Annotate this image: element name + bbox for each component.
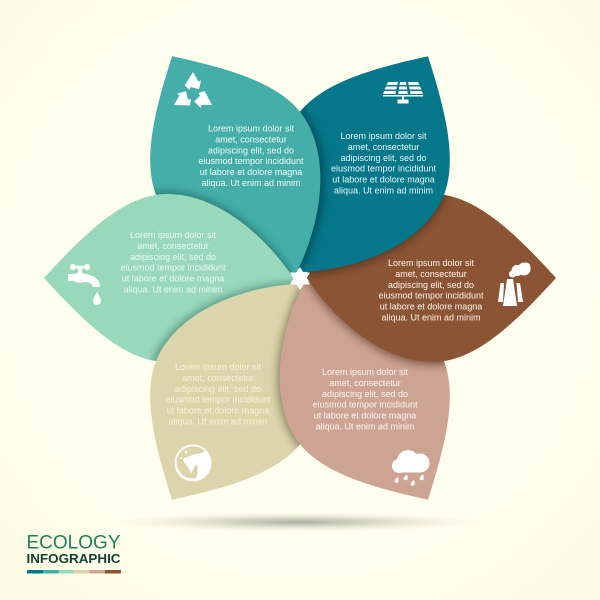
title	[26, 532, 120, 566]
text: solar: amet, consectetur	[348, 142, 419, 152]
text: water: Lorem ipsum dolor sit	[130, 230, 217, 240]
text: water	[120, 230, 226, 294]
text: factory: ut labore et dolore magna	[380, 302, 482, 312]
center star	[290, 267, 310, 290]
panel: solar	[298, 56, 450, 278]
text: water: adipiscing elit, sed do	[130, 252, 216, 262]
text: rain: eiusmod tempor incididunt	[312, 400, 418, 410]
icon: solar panel	[383, 82, 423, 104]
text: factory: eiusmod tempor incididunt	[378, 290, 484, 300]
text: factory: adipiscing elit, sed do	[388, 280, 474, 290]
text: solar: aliqua. Ut enim ad minim	[334, 186, 433, 196]
text: solar: ut labore et dolore magna	[332, 174, 435, 184]
text: factory	[378, 258, 484, 322]
text: factory: Lorem ipsum dolor sit	[388, 258, 475, 268]
text: rain: ut labore et dolore magna	[314, 410, 416, 420]
colour legend bar	[27, 570, 121, 574]
ground shadow	[108, 512, 488, 532]
panel: rain	[272, 281, 450, 500]
text: factory: amet, consectetur	[395, 269, 467, 279]
text: rain	[312, 367, 418, 432]
text: rain: adipiscing elit, sed do	[322, 389, 408, 399]
panel: factory	[305, 194, 556, 365]
text: recycling	[198, 124, 304, 188]
text: water: eiusmod tempor incididunt	[120, 262, 226, 272]
icon: recycling	[171, 71, 212, 112]
text: rain: aliqua. Ut enim ad minim	[315, 422, 415, 432]
text: earth: Lorem ipsum dolor sit	[175, 362, 262, 372]
text: factory: aliqua. Ut enim ad minim	[381, 312, 481, 322]
text: earth	[165, 362, 271, 426]
text: recycling: adipiscing elit, sed do	[208, 146, 294, 156]
text: solar: eiusmod tempor incididunt	[331, 164, 437, 174]
icon: rain cloud	[392, 450, 430, 486]
text: recycling: aliqua. Ut enim ad minim	[201, 178, 301, 188]
text: water: aliqua. Ut enim ad minim	[123, 284, 223, 294]
text: water: ut labore et dolore magna	[122, 274, 224, 284]
text: water: amet, consectetur	[137, 241, 209, 251]
text: solar: adipiscing elit, sed do	[340, 153, 427, 163]
text: solar: Lorem ipsum dolor sit	[340, 131, 427, 141]
panel: earth	[148, 278, 302, 500]
text: recycling: eiusmod tempor incididunt	[198, 156, 304, 166]
panel: recycling	[172, 56, 328, 272]
icon: globe	[174, 444, 212, 482]
text: recycling: Lorem ipsum dolor sit	[208, 124, 295, 134]
text: earth: aliqua. Ut enim ad minim	[168, 416, 268, 426]
title: INFOGRAPHIC	[26, 552, 120, 566]
text: earth: eiusmod tempor incididunt	[165, 394, 271, 404]
title: ECOLOGY	[26, 532, 120, 554]
text: recycling: ut labore et dolore magna	[200, 167, 302, 177]
teal petal underlap	[99, 14, 370, 316]
text: rain: amet, consectetur	[329, 378, 401, 388]
panel: water	[44, 192, 295, 362]
icon: faucet	[68, 264, 101, 305]
text: earth: adipiscing elit, sed do	[175, 384, 261, 394]
text: earth: ut labore et dolore magna	[167, 406, 269, 416]
icon: factory smoke	[498, 262, 530, 306]
text: recycling: amet, consectetur	[215, 134, 287, 144]
text: earth: amet, consectetur	[182, 373, 254, 383]
text: rain: Lorem ipsum dolor sit	[322, 367, 409, 377]
text: solar	[331, 131, 437, 196]
